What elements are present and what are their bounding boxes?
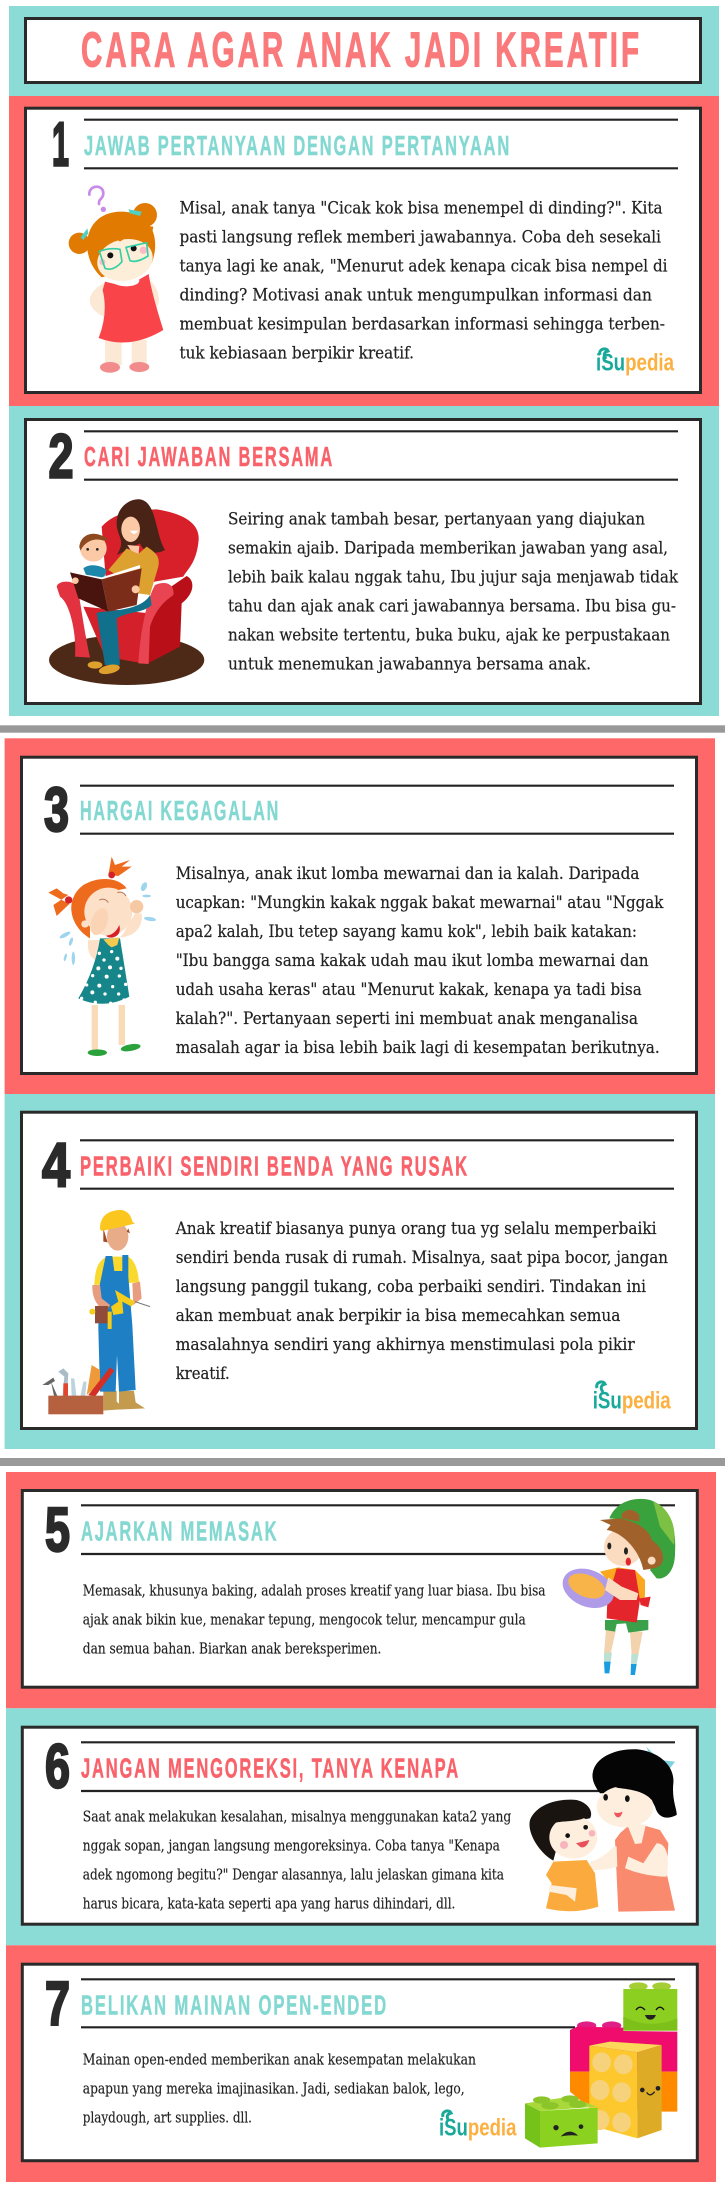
text block: step 7: apapun yang mereka imajinasikan. Jadi, sediakan balok, lego,: [83, 2081, 465, 2097]
logo: iSupedia: iSupedia: [596, 350, 675, 377]
text block: step 5: [83, 1583, 546, 1657]
icon: crying girl: [48, 857, 156, 1056]
icon: boy baking with bowl: [557, 1499, 675, 1675]
text block: step 1: tuk kebiasaan berpikir kreatif.: [180, 343, 414, 363]
panel: step 4: [5, 1094, 715, 1449]
heading: step 5: AJARKAN MEMASAK: [81, 1515, 278, 1546]
divider band: [0, 1458, 725, 1466]
text block: step 4: sendiri benda rusak di rumah. Misalnya, saat pipa bocor, jangan: [176, 1248, 668, 1268]
panel: step 6: [6, 1708, 716, 1945]
text block: step 2: lebih baik kalau nggak tahu, Ibu jujur saja menjawab tidak: [228, 567, 679, 587]
text block: step 6: adek ngomong begitu?" Dengar alasannya, lalu jelaskan gimana kita: [83, 1868, 504, 1884]
text block: step 6: Saat anak melakukan kesalahan, misalnya menggunakan kata2 yang: [83, 1810, 511, 1826]
text block: step 1: tanya lagi ke anak, "Menurut adek kenapa cicak bisa nempel di: [180, 256, 668, 276]
text block: step 5: Memasak, khusunya baking, adalah proses kreatif yang luar biasa. Ibu bisa: [83, 1583, 546, 1599]
text block: step 3: Misalnya, anak ikut lomba mewarnai dan ia kalah. Daripada: [176, 864, 639, 884]
panel: step 5: [6, 1472, 716, 1708]
text block: step 2: semakin ajaib. Daripada memberikan jawaban yang asal,: [228, 538, 668, 558]
icon: mother and child talking: [529, 1747, 677, 1912]
panel: step 3: [5, 738, 715, 1094]
text block: step 3: [176, 864, 664, 1058]
text block: step 4: Anak kreatif biasanya punya orang tua yg selalu memperbaiki: [175, 1219, 657, 1239]
number 2: 2: [48, 422, 74, 492]
logo: iSupedia: iSupedia: [593, 1387, 671, 1414]
text block: step 3: udah usaha keras" atau "Menurut kakak, kenapa ya tadi bisa: [176, 980, 642, 1000]
number 3: 3: [44, 776, 69, 845]
icon: mother reading to child in armchair: [49, 499, 204, 685]
number 6: 6: [45, 1733, 70, 1802]
icon: handyman with drill and toolbox: [42, 1210, 150, 1414]
number 7: 7: [45, 1970, 70, 2039]
text block: step 5: dan semua bahan. Biarkan anak bereksperimen.: [83, 1641, 381, 1657]
text block: step 1: dinding? Motivasi anak untuk mengumpulkan informasi dan: [180, 285, 652, 305]
heading: step 2: CARI JAWABAN BERSAMA: [84, 441, 334, 472]
text block: step 2: [228, 509, 679, 674]
panel: title banner: [9, 6, 719, 96]
heading: step 7: BELIKAN MAINAN OPEN-ENDED: [81, 1989, 388, 2020]
text block: step 7: [83, 2052, 477, 2126]
text block: step 3: ucapkan: "Mungkin kakak nggak bakat mewarnai" atau "Nggak: [176, 893, 664, 913]
text block: step 1: membuat kesimpulan berdasarkan informasi sehingga terben-: [180, 314, 665, 334]
text block: step 3: apa2 kalah, Ibu tetep sayang kamu kok", lebih baik katakan:: [176, 922, 637, 942]
text block: step 7: playdough, art supplies. dll.: [83, 2110, 252, 2126]
text block: step 1: Misal, anak tanya "Cicak kok bisa menempel di dinding?". Kita: [180, 198, 662, 218]
text block: step 3: kalah?". Pertanyaan seperti ini membuat anak menganalisa: [176, 1009, 638, 1029]
text block: step 4: [175, 1219, 668, 1384]
panel: step 7: [6, 1945, 716, 2182]
text block: step 2: tahu dan ajak anak cari jawabannya bersama. Ibu bisa gu-: [228, 596, 676, 616]
text block: step 6: nggak sopan, jangan langsung mengoreksinya. Coba tanya "Kenapa: [83, 1839, 500, 1855]
text block: step 2: untuk menemukan jawabannya bersama anak.: [228, 654, 591, 674]
divider band: [0, 725, 725, 733]
icon: lego bricks with faces: [525, 1982, 677, 2148]
heading: step 4: PERBAIKI SENDIRI BENDA YANG RUSAK: [80, 1151, 469, 1182]
icon: girl with glasses and question mark: [69, 187, 163, 373]
text block: step 6: harus bicara, kata-kata seperti apa yang harus dihindari, dll.: [83, 1897, 455, 1913]
text block: step 7: Mainan open-ended memberikan anak kesempatan melakukan: [83, 2052, 477, 2068]
number 5: 5: [45, 1496, 70, 1565]
text block: step 3: "Ibu bangga sama kakak udah mau ikut lomba mewarnai dan: [176, 951, 649, 971]
text block: step 4: masalahnya sendiri yang akhirnya menstimulasi pola pikir: [176, 1335, 635, 1355]
text block: step 4: langsung panggil tukang, coba perbaiki sendiri. Tindakan ini: [176, 1277, 646, 1297]
logo: iSupedia: iSupedia: [439, 2115, 517, 2142]
text block: step 4: akan membuat anak berpikir ia bisa memecahkan semua: [176, 1306, 620, 1326]
heading: step 3: HARGAI KEGAGALAN: [80, 795, 280, 826]
text block: step 1: pasti langsung reflek memberi jawabannya. Coba deh sesekali: [180, 227, 661, 247]
text block: step 3: masalah agar ia bisa lebih baik lagi di kesempatan berikutnya.: [176, 1038, 660, 1058]
panel: step 2: [9, 406, 719, 716]
text block: step 2: nakan website tertentu, buka buku, ajak ke perpustakaan: [228, 625, 670, 645]
text block: step 1: [180, 198, 668, 363]
number 4: 4: [42, 1131, 70, 1200]
panel: step 1: 1: [52, 110, 69, 180]
panel: step 1: [9, 96, 719, 406]
text block: step 6: [83, 1810, 511, 1913]
text block: step 4: kreatif.: [176, 1364, 230, 1384]
text block: step 2: Seiring anak tambah besar, pertanyaan yang diajukan: [228, 509, 645, 529]
heading: step 6: JANGAN MENGOREKSI, TANYA KENAPA: [81, 1753, 460, 1784]
text block: step 5: ajak anak bikin kue, menakar tepung, mengocok telur, mencampur gula: [83, 1612, 526, 1628]
